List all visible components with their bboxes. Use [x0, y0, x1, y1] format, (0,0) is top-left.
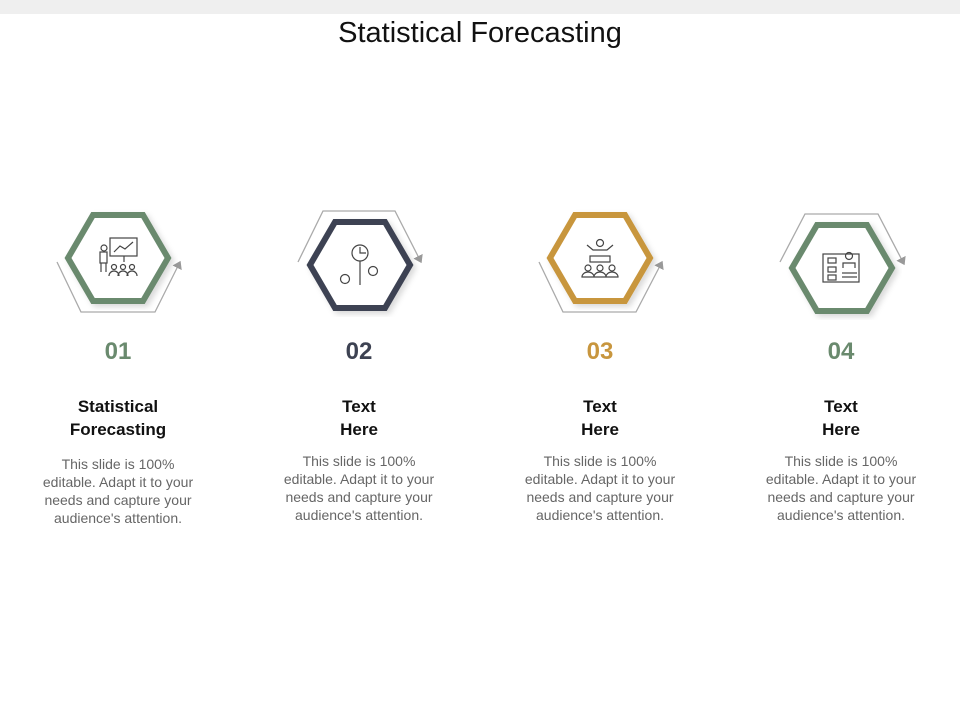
- hexagon 4: [780, 214, 904, 311]
- text: needs and capture your: [44, 492, 192, 508]
- text: Here: [340, 420, 378, 439]
- item 1: [43, 338, 193, 526]
- hexagon 2: [298, 211, 421, 308]
- text: This slide is 100%: [785, 453, 897, 469]
- text: This slide is 100%: [544, 453, 656, 469]
- text: editable. Adapt it to your: [284, 471, 434, 487]
- text: Forecasting: [70, 420, 166, 439]
- title: Statistical Forecasting: [338, 17, 622, 49]
- hexagon 3: [539, 215, 662, 312]
- text: needs and capture your: [767, 489, 915, 505]
- text: 02: [346, 338, 372, 365]
- text: 01: [105, 338, 131, 365]
- item 2: [284, 338, 434, 523]
- text: needs and capture your: [285, 489, 433, 505]
- text: Statistical: [78, 397, 158, 416]
- text: audience's attention.: [777, 507, 905, 523]
- text: Text: [583, 397, 617, 416]
- item 3: [525, 338, 675, 523]
- text: Text: [342, 397, 376, 416]
- text: Text: [824, 397, 858, 416]
- hexagon 1: [57, 215, 180, 312]
- text: audience's attention.: [536, 507, 664, 523]
- text: editable. Adapt it to your: [766, 471, 916, 487]
- text: This slide is 100%: [62, 456, 174, 472]
- item 4: [766, 338, 916, 523]
- text: audience's attention.: [295, 507, 423, 523]
- text: 03: [587, 338, 613, 365]
- text: Here: [822, 420, 860, 439]
- text: Here: [581, 420, 619, 439]
- top bar: [0, 0, 960, 14]
- text: audience's attention.: [54, 510, 182, 526]
- text: This slide is 100%: [303, 453, 415, 469]
- text: editable. Adapt it to your: [525, 471, 675, 487]
- text: editable. Adapt it to your: [43, 474, 193, 490]
- text: needs and capture your: [526, 489, 674, 505]
- text: 04: [828, 338, 854, 365]
